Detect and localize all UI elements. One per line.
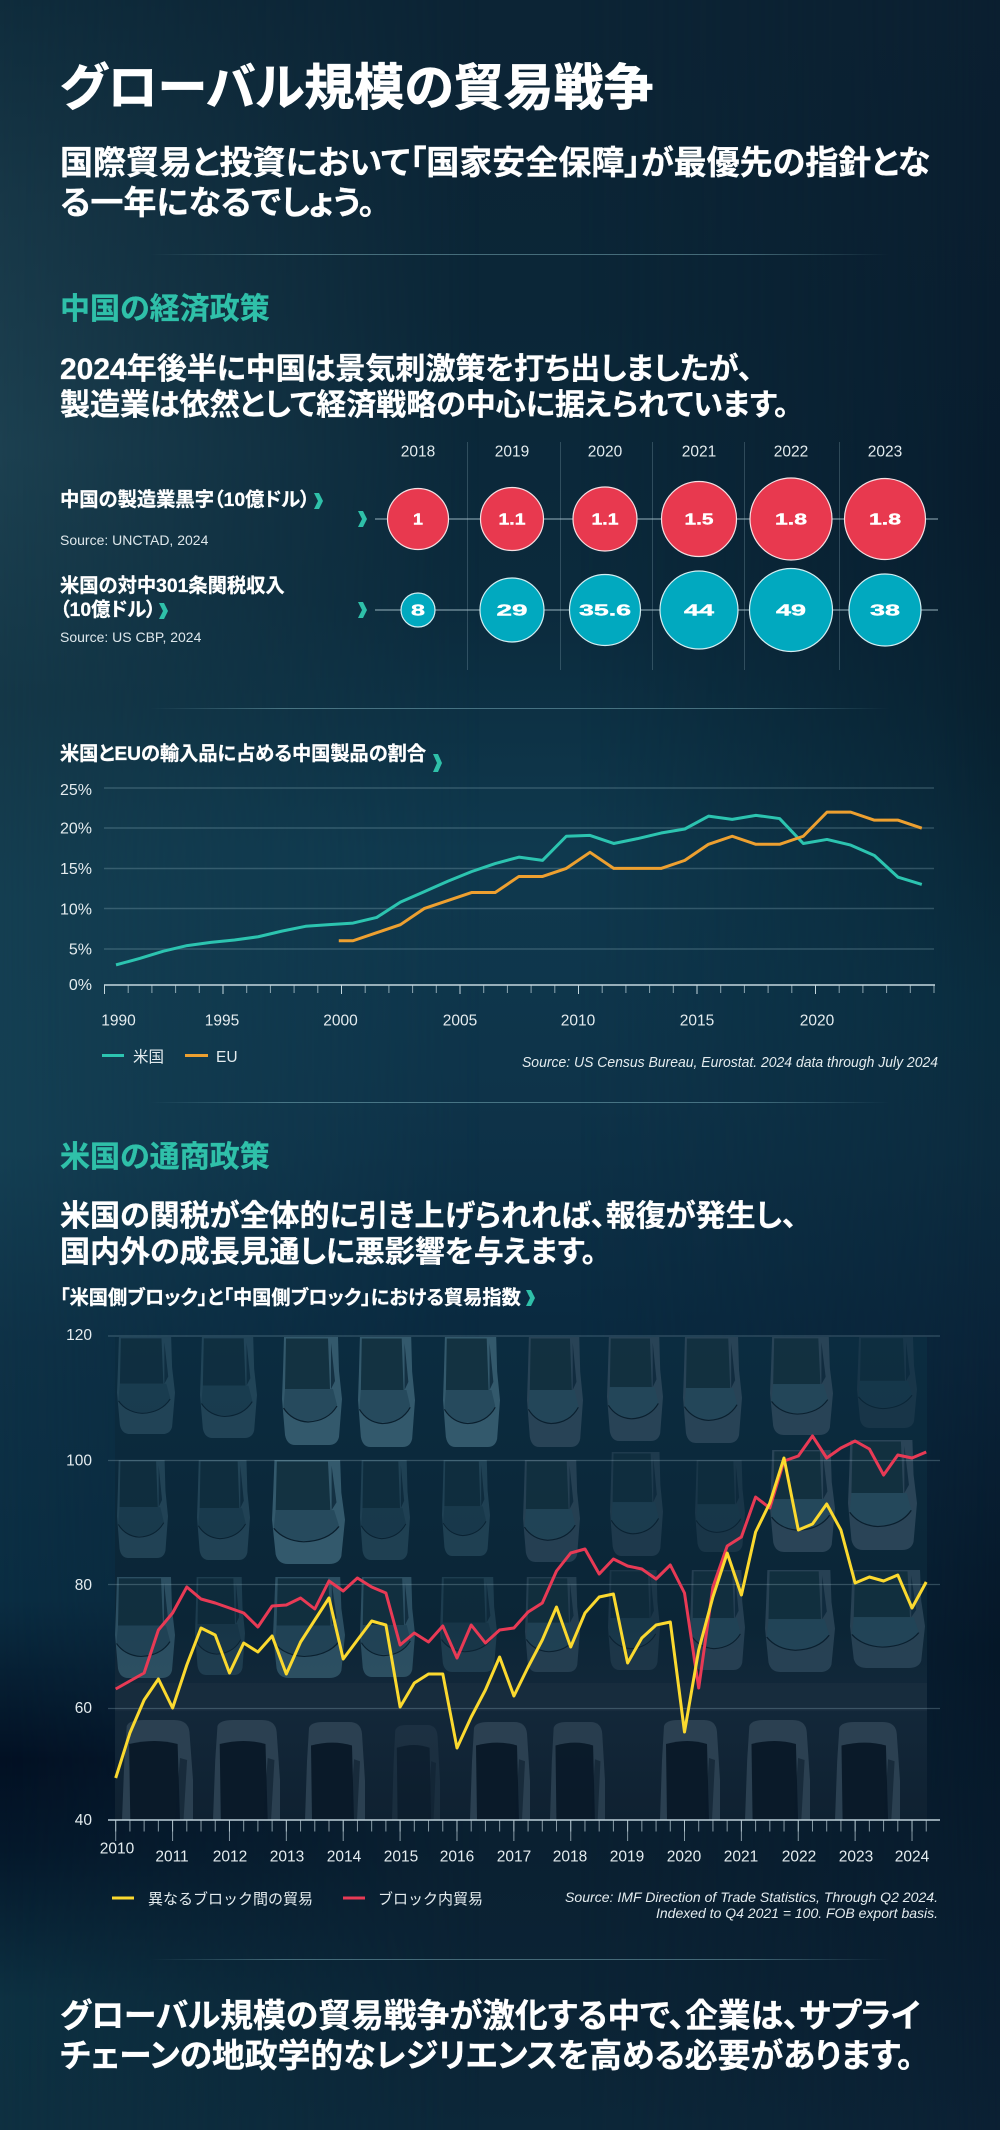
year labels: 2018 [401,444,435,460]
x axis labels: 1995 [205,1012,239,1030]
source note: Source: US Census Bureau, Eurostat. 2024 data through July 2024 [522,1055,938,1071]
chevrons [159,493,367,619]
x axis labels: 1990 [101,1012,136,1030]
heading: China economic policy: 中国の経済政策 [60,293,270,326]
bubble values: 44 [684,602,714,620]
x axis labels: 2013 [270,1848,304,1866]
line chart: trade index with car photo backdrop [66,1290,940,1921]
lead text: China: 2024年後半に中国は景気刺激策を打ち出しましたが、 [60,353,753,386]
bubble values: 49 [776,602,806,620]
bubble values: 38 [870,602,900,620]
y axis labels: 120 [66,1327,92,1344]
lead text: China [60,352,789,422]
x axis labels: 2010 [561,1012,596,1030]
bubble values: 1.5 [684,512,714,528]
bubble table [159,442,938,670]
x axis labels: 2015 [384,1848,418,1866]
y axis labels: 25% [60,782,92,799]
x axis labels: 2011 [155,1848,189,1866]
x axis labels: 2024 [895,1848,930,1866]
chart title: trade index: 「米国側ブロック」と「中国側ブロック」における貿易指数 [60,1288,521,1309]
bubble values: 8 [411,602,425,620]
subtitle: 国際貿易と投資において「国家安全保障」が最優先の指針とな [60,144,930,181]
bubble values: 1.8 [869,512,901,528]
heading: US trade policy: 米国の通商政策 [60,1141,270,1174]
bubble values: 1.8 [775,512,807,528]
subtitle [60,144,930,221]
chevron [433,754,442,772]
title: グローバル規模の貿易戦争 [60,60,654,116]
x axis labels: 2021 [724,1848,758,1866]
teal bubbles [401,568,921,652]
legend: ブロック内貿易 [378,1890,483,1908]
source note [565,1889,938,1921]
x axis labels [100,1840,930,1866]
row label: section 301 tariff revenue: （10億ドル） [60,600,156,621]
car photo backdrop [115,1337,927,1820]
y axis labels: 0% [69,977,92,994]
year labels: 2019 [495,444,529,460]
x axis labels: 2017 [497,1848,531,1866]
year labels [401,444,902,460]
row label: manufacturing surplus: 中国の製造業黒字（10億ドル） [60,490,310,511]
legend: 米国 [133,1048,164,1066]
x axis labels [101,1012,835,1030]
lead text: US: 国内外の成長見通しに悪影響を与えます。 [60,1236,596,1269]
source note: Source: IMF Direction of Trade Statistics, Through Q2 2024. [565,1889,938,1905]
x axis labels: 2018 [553,1848,587,1866]
EU line [339,812,922,941]
lead text: US [60,1200,797,1269]
bubble values: 29 [496,602,528,620]
source note: Indexed to Q4 2021 = 100. FOB export basis. [656,1905,938,1921]
y axis labels: 5% [69,942,92,958]
bubble values [411,512,901,620]
legend: EU [216,1049,238,1066]
closing statement: グローバル規模の貿易戦争が激化する中で、企業は、サプライ [60,1997,920,2034]
subtitle: る一年になるでしょう。 [60,184,375,221]
closing statement [60,1997,920,2074]
closing statement: チェーンの地政学的なレジリエンスを高める必要があります。 [60,2037,913,2074]
bubble values: 1.1 [592,512,619,528]
y axis labels: 40 [75,1812,92,1829]
bubble values: 35.6 [579,602,631,620]
x axis labels: 2000 [323,1012,358,1030]
year labels: 2022 [774,444,808,460]
row label: manufacturing surplus [60,489,310,548]
y axis labels: 80 [75,1577,92,1594]
y axis labels: 60 [75,1700,92,1717]
year labels: 2021 [682,444,716,460]
y axis labels: 100 [66,1452,92,1470]
bubble values: 1.1 [498,512,526,528]
red bubbles [388,478,926,560]
year labels: 2023 [868,444,902,460]
row label: section 301 tariff revenue [60,575,285,645]
row label: section 301 tariff revenue: 米国の対中301条関税収入 [60,576,285,597]
US line [116,815,922,965]
x axis labels: 2022 [782,1848,816,1866]
lead text: China: 製造業は依然として経済戦略の中心に据えられています。 [60,389,789,422]
x axis labels: 2019 [610,1848,644,1866]
chevron [526,1290,535,1306]
source: US CBP: Source: US CBP, 2024 [60,629,201,645]
yellow line: between-bloc trade [116,1458,926,1778]
line chart: share of imports [60,754,938,1071]
legend: 異なるブロック間の貿易 [148,1890,313,1908]
bubble values: 1 [413,512,423,528]
x axis labels: 2023 [839,1848,873,1866]
x axis labels: 2010 [100,1840,135,1858]
lead text: US: 米国の関税が全体的に引き上げられれば、報復が発生し、 [60,1200,797,1233]
y axis labels [60,782,92,994]
legend [112,1890,483,1908]
y axis labels: 10% [60,902,92,918]
source: UNCTAD: Source: UNCTAD, 2024 [60,532,208,548]
x axis labels: 2020 [667,1848,702,1866]
year labels: 2020 [588,444,623,460]
x axis labels: 2020 [800,1012,835,1030]
x axis labels: 2005 [443,1012,477,1030]
x axis labels: 2016 [440,1848,474,1866]
y axis labels: 15% [60,861,92,878]
y axis labels: 20% [60,820,92,838]
x axis labels: 2012 [213,1848,247,1866]
legend [102,1048,238,1066]
x axis labels: 2015 [680,1012,714,1030]
red line: within-bloc trade [116,1436,926,1689]
y axis labels [66,1327,92,1829]
chart title: share of Chinese goods: 米国とEUの輸入品に占める中国製品の割合 [60,744,426,765]
x axis labels: 2014 [327,1848,362,1866]
